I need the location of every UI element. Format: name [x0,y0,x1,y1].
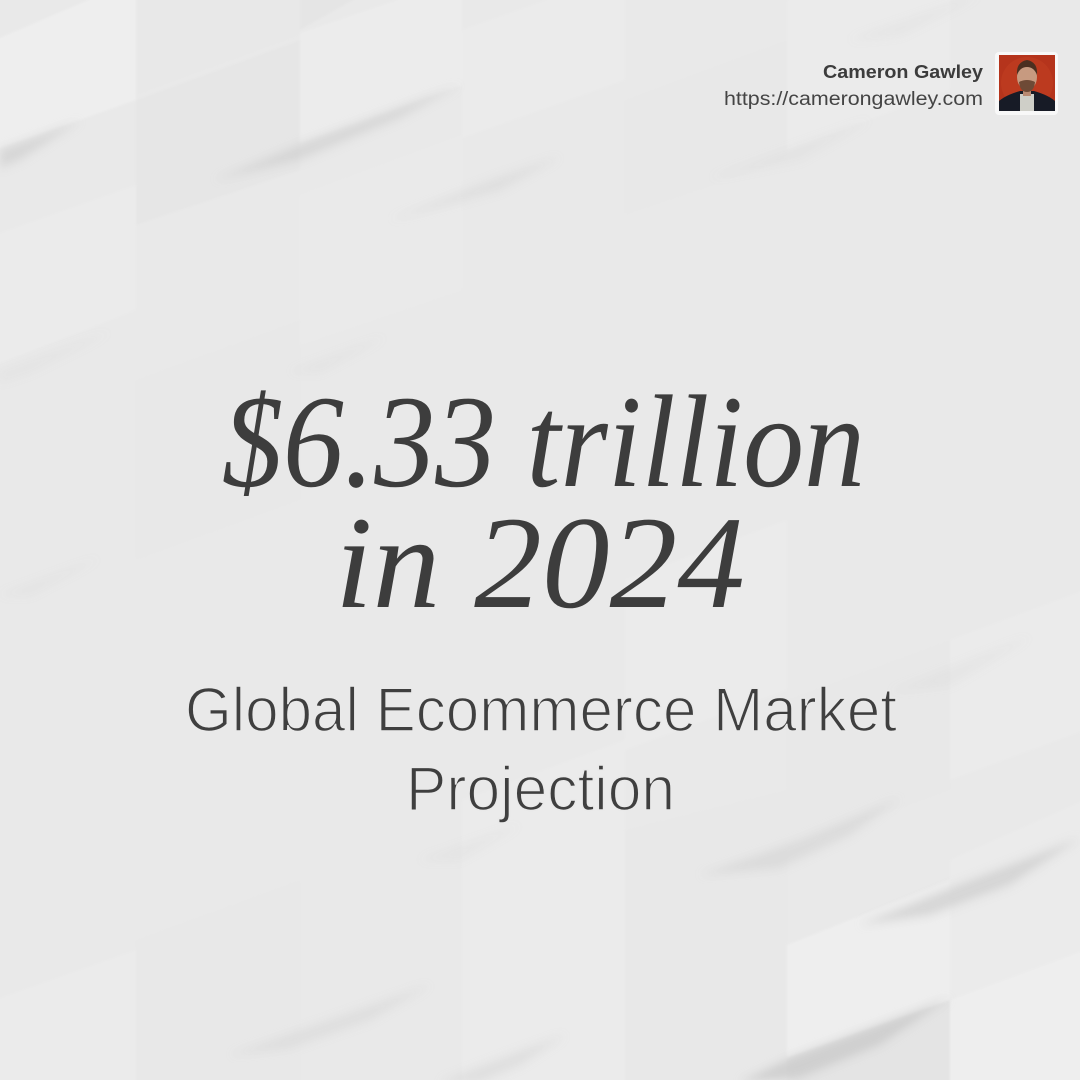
author photo [995,52,1058,115]
subtitle line 2: Projection [406,755,675,824]
author name: Cameron Gawley [823,62,983,82]
title [222,368,865,636]
subtitle [185,676,897,824]
author block [724,52,1058,115]
subtitle line 1: Global Ecommerce Market [185,676,897,745]
author url: https://camerongawley.com [724,89,983,110]
title line 1: $6.33 trillion [222,368,865,515]
title line 2: in 2024 [335,489,745,636]
